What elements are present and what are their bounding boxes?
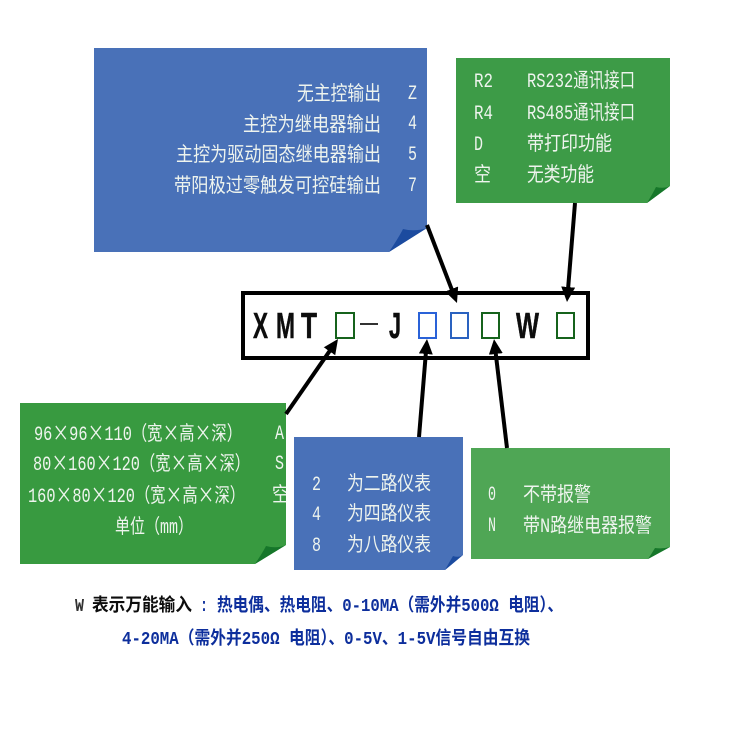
text: output type options: 5 bbox=[408, 144, 417, 167]
icon: page fold, output type panel bbox=[389, 228, 427, 252]
text: model code letters: M bbox=[276, 305, 295, 346]
text: output type options: 主控为继电器输出 bbox=[243, 113, 381, 138]
icon: page fold, communication panel bbox=[647, 186, 670, 203]
text: communication options: R4 bbox=[474, 103, 493, 126]
text: alarm options: 0 bbox=[488, 484, 496, 507]
text: communication options: 带打印功能 bbox=[527, 132, 612, 157]
text: communication options: RS485通讯接口 bbox=[527, 101, 635, 126]
text: communication options bbox=[474, 69, 635, 188]
text: model code letters bbox=[253, 305, 539, 346]
text: universal input note: : bbox=[200, 597, 208, 617]
text: communication options: R2 bbox=[474, 71, 493, 94]
text: model code letters: W bbox=[516, 305, 539, 346]
text: model code letters: J bbox=[389, 305, 401, 346]
panel: output type bbox=[94, 48, 427, 252]
text: universal input note bbox=[75, 594, 563, 650]
icon: code placeholder squares bbox=[336, 313, 574, 338]
text: model code letters: X bbox=[253, 305, 268, 346]
text: dimension options: S bbox=[275, 453, 284, 476]
text: universal input note: 表示万能输入 bbox=[92, 594, 192, 617]
text: communication options: RS232通讯接口 bbox=[527, 69, 635, 94]
text: channel options bbox=[312, 472, 431, 558]
text: dimension options: 空 bbox=[272, 483, 289, 508]
text: universal input note: 热电偶、热电阻、0-10MA（需外并500Ω 电阻）、 bbox=[217, 594, 563, 617]
text: universal input note: 4-20MA（需外并250Ω 电阻）、0-5V、1-5V信号自由互换 bbox=[122, 627, 530, 650]
text: dimension options bbox=[29, 422, 286, 535]
icon: page fold, channel panel bbox=[445, 555, 463, 570]
panel: channel count bbox=[294, 437, 463, 570]
text: channel options: 4 bbox=[312, 504, 321, 527]
panel: alarm bbox=[471, 448, 670, 559]
text: output type options: 4 bbox=[408, 113, 417, 136]
arrow: alarm bbox=[495, 349, 507, 448]
arrow: channels bbox=[419, 349, 426, 437]
text: communication options: 空 bbox=[474, 163, 491, 188]
text: communication options: D bbox=[474, 134, 483, 157]
text: output type options: 带阳极过零触发可控硅输出 bbox=[174, 174, 381, 199]
text: output type options: 7 bbox=[408, 175, 417, 198]
text: output type options: 主控为驱动固态继电器输出 bbox=[176, 143, 381, 168]
panel: dimensions bbox=[20, 403, 289, 564]
arrow: dimensions bbox=[286, 347, 332, 414]
text: alarm options bbox=[488, 483, 652, 539]
text: channel options: 为八路仪表 bbox=[347, 533, 431, 558]
text: alarm options: N bbox=[488, 515, 496, 538]
text: channel options: 为二路仪表 bbox=[347, 472, 431, 497]
text: universal input note: W bbox=[75, 597, 84, 617]
text: dimension options: A bbox=[275, 423, 284, 446]
text: channel options: 8 bbox=[312, 535, 321, 558]
text: alarm options: 带N路继电器报警 bbox=[523, 514, 652, 539]
text: model code letters: T bbox=[301, 305, 317, 346]
text: channel options: 为四路仪表 bbox=[347, 502, 431, 527]
panel: communication function bbox=[456, 58, 670, 203]
text: dimension options: 80×160×120（宽×高×深） bbox=[33, 446, 250, 478]
panel: model code box bbox=[243, 293, 588, 358]
text: communication options: 无类功能 bbox=[527, 163, 594, 188]
arrows: connectors to code box bbox=[286, 203, 575, 448]
icon: page fold, dimensions panel bbox=[255, 545, 286, 564]
icon: page fold, alarm panel bbox=[648, 547, 670, 559]
text: dimension options: 单位（mm） bbox=[115, 515, 193, 540]
text: output type options bbox=[174, 82, 417, 199]
arrow: output type bbox=[427, 225, 453, 294]
arrow: communication bbox=[568, 203, 575, 292]
text: output type options: 无主控输出 bbox=[297, 82, 381, 107]
text: dimension options: 160×80×120（宽×高×深） bbox=[28, 478, 245, 510]
text: alarm options: 不带报警 bbox=[523, 483, 591, 508]
text: dimension options: 96×96×110（宽×高×深） bbox=[34, 416, 242, 448]
text: channel options: 2 bbox=[312, 474, 321, 497]
text: output type options: Z bbox=[408, 83, 417, 106]
